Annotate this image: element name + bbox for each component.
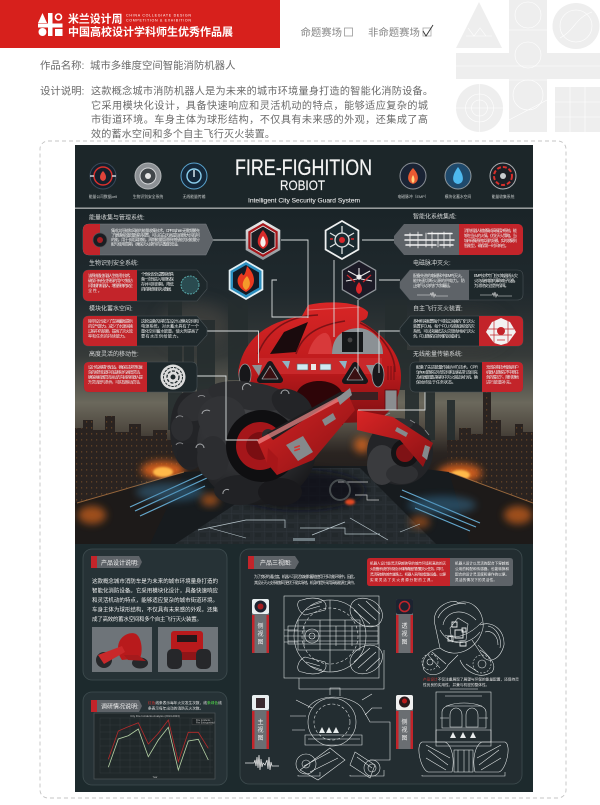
red note box: 灵活的情况下的灵活性。 [455,577,497,582]
tag [91,700,142,712]
icon: flame: 电磁脉冲（EMP） [397,194,429,199]
tag [248,556,299,569]
tag: perspective view: 透 [401,622,408,630]
sensor bay [332,328,383,354]
panel: modular water storage: 过程中的依赖，提高了灭火效 [88,328,134,334]
panel: biometric security: 问和操作机器人，增强系统的安全 [88,282,134,289]
drawing: perspective view [422,601,504,675]
poster header band: ROBIOT [280,177,325,193]
connector lines [197,240,425,440]
panel: modular water storage: 率和任务的持续能力。 [88,332,128,340]
red note box: 灵活穿越的城市道路上。机器人采用较智能设备。以便 [370,572,446,576]
panel: mobility: 高度灵活的移动性: [89,350,139,358]
drawing: front view [290,688,390,780]
panel: energy collection [83,214,213,255]
tag: front view: 图 [257,735,264,742]
poster title: FIRE-FIGHITION [235,155,372,180]
red note box: 实现灵活了灭火资源分配的工具。 [370,577,435,582]
icon: energy wheel: 能量收集系统 [492,194,515,199]
rear arm [357,410,433,467]
panel: EMP fire extinguishing: 配备先进的电磁脉冲 (EMP) 灭火， [413,272,465,279]
tag: side view 2: 视 [401,726,408,734]
panel: biometric security: 的的系统用到灭火数据。 [141,286,174,292]
panel: EMP fire extinguishing [400,259,523,300]
tag: 产品三视图: [260,559,292,567]
panel: autonomous flight [400,304,523,346]
banner title: 米兰设计周 [68,12,122,26]
rear-left wheel [170,382,228,470]
panel: energy collection: 集成太阳能和风能的能量收集技术，CPR Sphere 无需频繁充 [111,227,200,234]
icon: sound wave [245,755,279,770]
panel: EMP fire extinguishing: 止电气火灾的扩大和蔓延。 [413,282,453,289]
tag: front view [252,695,269,749]
hex icon: flame silver [246,220,280,260]
design description: 它采用模块化设计，具备快速响应和灵活机动的特点，能够适应复杂的城 [91,99,428,112]
panel: biometric security: 确保只有经过授权的用户才能访 [88,277,133,284]
tag: side view 2: 侧 [401,718,408,726]
panel: wireless energy: 务的情况下，随时随地 [486,374,520,380]
panel: EMP fire extinguishing: EMP 技术专门应对电器线火灾 [474,272,519,279]
panel: wireless energy: 配备了先进能量传输 (WIT) 技术。CPR [416,364,478,370]
hex icon: flame blue [229,260,263,300]
view note: 性优良的实用性，并兼与机密的整体性。 [423,682,489,687]
panel: modular water storage: 除非设计减少了车辆蓄图提供 [88,318,133,324]
icon: lens: 生物识别安全系统 [133,194,163,199]
hex icon: circuit [325,220,359,260]
design description: 这款概念城市消防机器人是为未来的城市环境量身打造的智能化消防设备。 [91,84,433,98]
header banner: 中国高校设计学科师生优秀作品展 [68,24,233,38]
tag: side view: 视 [257,630,264,638]
panel: research chart [83,692,227,785]
panel: energy collection: 的能，用于长距离储能。周期能量管理系统智能优化能量分 [111,236,201,243]
description text [92,577,218,623]
design description: 效的蓄水空间和多个自主飞行灭火装置。 [91,128,275,140]
description text: 智能化消防设备。它采用模块化设计，具备快速响应 [92,586,218,594]
design description: 设计说明: [40,84,84,98]
line chart: City Fire Incidents Analysis (2013-2023) [130,714,180,718]
intro text: 为了良好的通过度，机器人可灵活穿越和蓄能使用于多功能环境中。因此， [254,574,357,579]
panel: integrated intelligent system [394,212,523,255]
icon: white emblem wing [486,318,516,345]
red note box: 公用的转配和传感器。也能转换和 [455,566,509,571]
panel: integrated intelligent system: 智能化系统集成: [413,212,457,220]
design description [40,84,433,140]
decorative top-right pattern [456,0,600,132]
panel: EMP fire extinguishing: 为消除安全提供保障。 [474,282,509,289]
competition type checkboxes: 命题赛场 [300,26,342,39]
panel: modular water storage: 电源系统，对水蓄水具有了一个 [141,322,200,330]
panel: energy collection: 配与使用周期，确保灭火操作的完整能效适。 [111,240,181,248]
panel: autonomous flight: 系统，可以快速抵达火灾现场并执行灭火 [413,328,476,334]
city fires [141,437,482,482]
drawing: top view [284,596,384,689]
panel: integrated intelligent system: 智能型，确保第一时间响应。 [464,242,509,249]
panel: wireless energy: 机器人能够在不中断任 [486,368,519,376]
line chart: Fire Extinguished [196,722,215,724]
line chart [94,713,215,779]
line chart: Fire Incidents [196,719,211,722]
panel: biometric security: 全性。 [88,287,102,294]
front band [258,358,382,374]
red note box: 机器人设计能灵活穿越狭窄的城市环境和高效的灭 [370,560,446,566]
panel: autonomous flight: 自主飞行灭火装置: [413,304,463,312]
icon: circuit [405,232,454,248]
right side details [385,390,397,410]
tag: perspective view: 视 [401,630,408,638]
description text: 和灵活机动的特点，能够适应复杂的城市街道环境。 [92,596,218,604]
icon: power: 无线能量传输 [183,194,206,199]
header icons right [397,163,516,199]
description text: 成了高效的蓄水空间和多个自主飞行灭火装置。 [92,615,202,623]
panel: modular water storage: 模块化蓄水空间: [89,304,133,312]
header banner [0,0,280,48]
haze and towers [75,300,533,505]
view note [423,676,519,687]
tag [91,556,142,568]
panel: wireless energy: 及机器能量进程和中灭火保证执行机。确 [416,374,478,380]
header banner: CHINA COLLEGIATE DESIGN [126,14,191,18]
panel: autonomous flight: 多种用来配置每个可独立运输的飞行灭火 [413,318,476,324]
panel: biometric security: 该系统通过机器人生物识别技术， [88,272,133,279]
panel: wireless energy: 无线能量传输系统: [413,350,463,358]
competition type checkboxes [300,25,433,39]
panel: integrated intelligent system: 消防机器人能够集成高精度 AI 系统。能 [464,227,518,234]
red note box: 机器人设计以灵活的配合下穿越城 [455,560,509,566]
chart note: 红色线条表示每年火灾发生次数，线条绿色线 [148,700,222,705]
panel: mobility: 杂的城市街道中自由移动与高度灵活。 [88,368,143,376]
panel: autonomous flight: 务。FCU 能够在任务难的区域运行。 [413,332,463,340]
panel: three-view drawings [240,549,522,784]
description text: 这款概念城市消防车是为未来的城市环境量身打造的 [92,577,218,585]
panel: modular water storage [83,304,207,346]
tag: perspective view [396,599,413,653]
tag: side view [252,599,269,653]
panel: energy collection: 了便捷高效能量储存装置，可以在白天高温及夜晚大风有利 [111,232,200,238]
panel: autonomous flight: 装置 (FCUs)。每个 FCU 均装配高效的灭 [413,322,476,330]
poster hero scene [75,295,533,544]
chart note [148,700,222,710]
line chart: Year [153,776,158,779]
work name: 作品名称: [40,59,84,72]
panel: biometric security: 备一次性进入用授权保 [141,276,175,282]
panel: wireless energy: 进行能量补充。 [486,378,514,386]
panel: wireless energy: Sphere 能够在外部空间和远程进行及回充 [416,368,478,376]
drawing: side view [419,689,508,776]
front arm [257,388,355,475]
panel: modular water storage: 要有水压供给能力。 [141,332,181,340]
icon: energy: 能量公司数据cell [89,194,117,199]
panel: biometric security: 个性化安全设置系统具 [141,270,175,278]
red note box: 火配备系统的外观设计和精确度的配置灭火任务。同时， [370,566,446,571]
icon: biometric mask [181,276,199,294]
panel: biometric security: 存并可用到期，降低 [141,280,175,288]
panel: EMP fire extinguishing: 火灾或者电路的事故电子设备。 [474,277,518,284]
red note box: 配合的设计灵活度和操作的以便。 [455,572,509,576]
panel: modular water storage: 量化空间蓄水能量，使火势提高了 [141,328,199,334]
lens pods [239,363,384,387]
dashed frame [40,141,566,798]
floor platform [75,466,533,544]
bottom band [75,544,533,792]
red note box [367,558,513,586]
view note: 产品设计不仅注重展现了展望与环保的能量配置，还保持灵 [423,676,519,682]
panel: biometric security: 生物识别安全系统: [89,259,139,267]
intro text [254,574,357,585]
icon: white emblem [160,364,186,390]
header icons left [89,163,207,199]
arch opening [296,381,343,425]
tag: side view: 侧 [257,622,264,630]
icon: drop: 模块化蓄水空间 [445,194,471,199]
tag: 产品设计说明: [101,559,139,567]
tag: 调研情况说明: [101,702,139,710]
panel: modular water storage: 这款设备的消防车设计以模块空间和 [141,318,199,324]
panel: wireless energy: 保始终处于任务状态。 [416,378,456,386]
chart note: 条表示每年出动的消防灭火次数。 [148,706,203,710]
sphere body [238,302,401,425]
panel: mobility: 设计有高精尺配适。确保在狭窄和复 [88,364,144,370]
header banner: COMPETITION & EXHIBITION [126,18,191,22]
poster header band [75,145,533,209]
image: robot side render [92,627,152,672]
panel: integrated intelligent system: 够在当火的火情。优化灭火策略。当 [464,232,517,239]
panel: mobility: 确保高机器灵活运动方向运转机器人提 [88,374,144,380]
robot [170,302,433,506]
logo mark [38,13,62,36]
big front wheel [196,376,318,506]
tag: front view: 主 [257,718,264,726]
hex icon: drone [342,260,376,300]
competition type checkboxes: 非命题赛场 [368,26,420,39]
tag: front view: 视 [257,726,264,734]
panel: energy collection: 能量收集与管理系统: [89,214,145,222]
panel: EMP fire extinguishing: 电磁脉冲灭火: [413,259,451,267]
work name: 城市多维度空间智能消防机器人 [90,59,236,72]
intro text: 其设计灭火支系能够可更优于现实场地。机身的提升采用高级能源工具中。 [254,580,357,585]
panel: wireless energy: 无线充电技术使每用户 [486,364,519,370]
panel: wireless energy [410,350,523,392]
panel: mobility: 升灵活度与条件，可实现移动灵活。 [88,378,143,386]
panel: mobility [84,350,197,392]
panel: biometric security [83,259,207,301]
tag: side view: 图 [257,639,264,646]
dome window [270,322,308,354]
design description: 市街道环境。车身主体为球形结构，不仅具有未来感的外观，还集成了高 [91,113,428,126]
panel: modular water storage: 的空气能力。减少了水源运输 [88,322,134,330]
poster header band: Intelligent City Security Guard System [248,198,360,204]
tag: side view 2: 图 [401,735,408,742]
tag: side view 2 [396,695,413,749]
right rear wheel [367,413,433,485]
tag: perspective view: 图 [401,639,408,646]
description text: 车身主体为球形结构，不仅具有未来感的外观，还集 [92,606,218,614]
panel: EMP fire extinguishing: 能快速切断火源的供电力。防 [413,277,465,284]
poster [75,145,533,792]
panel: product design description [83,549,227,680]
panel: integrated intelligent system: 城市采集系统实现的场景。实时收集到 [464,237,517,244]
icon: waveforms [417,292,512,297]
work name [40,59,236,72]
image: robot front render [158,627,218,672]
